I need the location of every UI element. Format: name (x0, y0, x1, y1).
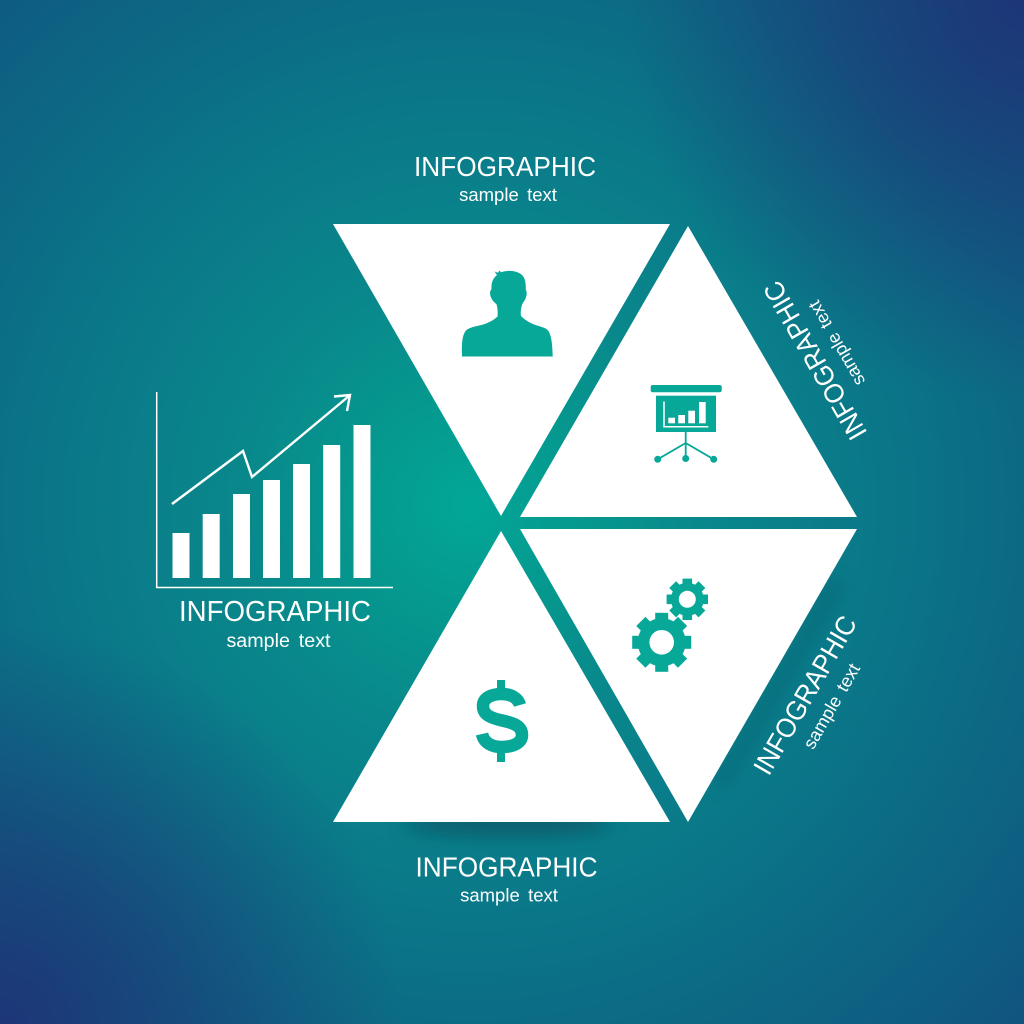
icon: gears (632, 579, 708, 672)
caption: bottom: sample text (460, 884, 558, 906)
shadow under bottom triangle (403, 811, 613, 837)
icon: presentation board (651, 385, 722, 463)
caption: top: INFOGRAPHIC (414, 151, 596, 182)
caption: bottom: INFOGRAPHIC (416, 852, 598, 882)
caption: bottom (416, 852, 598, 906)
caption: left (179, 596, 371, 652)
caption: upper right rotated: INFOGRAPHIC (757, 276, 873, 445)
icon: person (462, 270, 553, 356)
caption: left: INFOGRAPHIC (179, 596, 371, 628)
caption: top (414, 151, 596, 205)
panel: lower left triangle with dollar sign (333, 531, 670, 822)
caption: top: sample text (459, 184, 557, 205)
panel: upper right triangle with presentation board (520, 226, 857, 517)
bar chart with rising arrow (157, 392, 393, 588)
panel: top triangle with person (333, 224, 670, 516)
icon: dollar sign (482, 680, 522, 762)
caption: lower right rotated: INFOGRAPHIC (747, 610, 863, 780)
caption: upper right rotated: sample text (804, 297, 869, 389)
caption: left: sample text (226, 630, 331, 652)
shadow beside lower right triangle (715, 575, 842, 790)
caption: lower right rotated: sample text (799, 660, 864, 752)
panel: lower right triangle with gears (520, 529, 857, 822)
